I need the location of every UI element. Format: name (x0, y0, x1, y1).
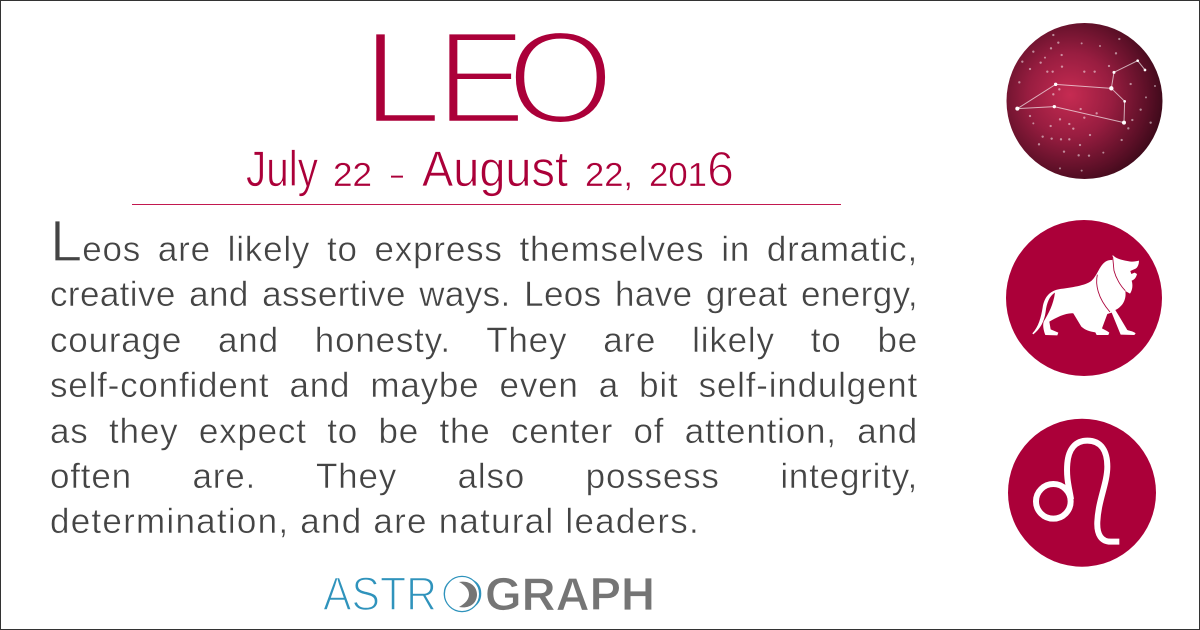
text: courage and honesty. They are likely to be (50, 321, 918, 360)
logo: ASTR (323, 567, 437, 620)
icon: leo glyph (1008, 419, 1156, 567)
date range: - (388, 153, 406, 194)
date range (246, 141, 734, 197)
logo: GRAPH (485, 568, 655, 620)
text: often are. They also possess integrity, (50, 457, 918, 496)
text: Leos are likely to express themselves in dramatic, (50, 209, 918, 274)
title: L (362, 4, 442, 151)
date range: 6 (707, 143, 734, 197)
title: E (436, 4, 526, 151)
date range: 22 (333, 156, 372, 193)
date range: 22, (585, 156, 633, 193)
logo: O (440, 567, 485, 620)
text: creative and assertive ways. Leos have great energy, (50, 275, 918, 314)
text: as they expect to be the center of attention, and (50, 412, 918, 451)
text: self-confident and maybe even a bit self-indulgent (50, 366, 918, 405)
logo (323, 567, 655, 620)
body text (50, 209, 918, 541)
title: O (507, 4, 614, 151)
date range: July (246, 141, 318, 197)
date range: 201 (649, 156, 707, 193)
divider rule (132, 204, 841, 205)
text: determination, and are natural leaders. (50, 502, 700, 541)
title (362, 4, 614, 151)
date range: August (422, 141, 568, 197)
icon: constellation globe (1006, 23, 1162, 179)
icon: lion (1006, 220, 1162, 376)
